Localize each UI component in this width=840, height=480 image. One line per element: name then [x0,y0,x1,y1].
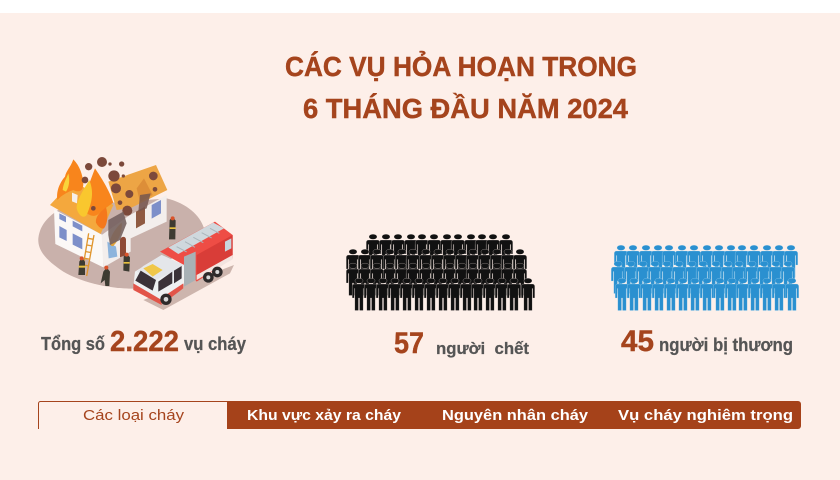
stat: deaths: người chết [436,339,529,358]
active tab: fire types [38,402,228,429]
smoke clouds [82,157,158,245]
title: 6 THÁNG ĐẦU NĂM 2024 [303,93,628,124]
title [285,50,637,124]
pictogram: black people, deaths [346,234,535,310]
flames [57,159,122,246]
stat: total fires: Tổng số [41,334,105,354]
tab bar [38,401,801,429]
roofs [50,165,167,234]
tab: area: Khu vực xảy ra cháy [247,407,402,424]
stat: total fires: vụ cháy [184,334,246,354]
ground shadow [38,198,204,289]
house walls [54,195,167,267]
pictogram: blue people, injured [611,245,799,310]
tab: causes: Nguyên nhân cháy [442,407,589,424]
stat: deaths: 57 [394,327,424,360]
stat: deaths [394,327,529,360]
title: CÁC VỤ HỎA HOẠN TRONG [285,50,637,82]
ladder [82,233,94,276]
inactive tabs background [227,401,801,429]
illustration: burning house and fire truck [38,157,234,310]
stat: injured: 45 [621,325,654,358]
stat: injured [621,325,793,358]
active tab: fire types: Các loại cháy [83,407,185,424]
tab: serious fires: Vụ cháy nghiêm trọng [618,407,793,424]
stat: total fires [41,326,246,358]
firefighters [78,216,176,286]
stat: injured: người bị thương [659,335,793,355]
stat: total fires: 2.222 [110,326,179,358]
fire truck [133,222,234,310]
